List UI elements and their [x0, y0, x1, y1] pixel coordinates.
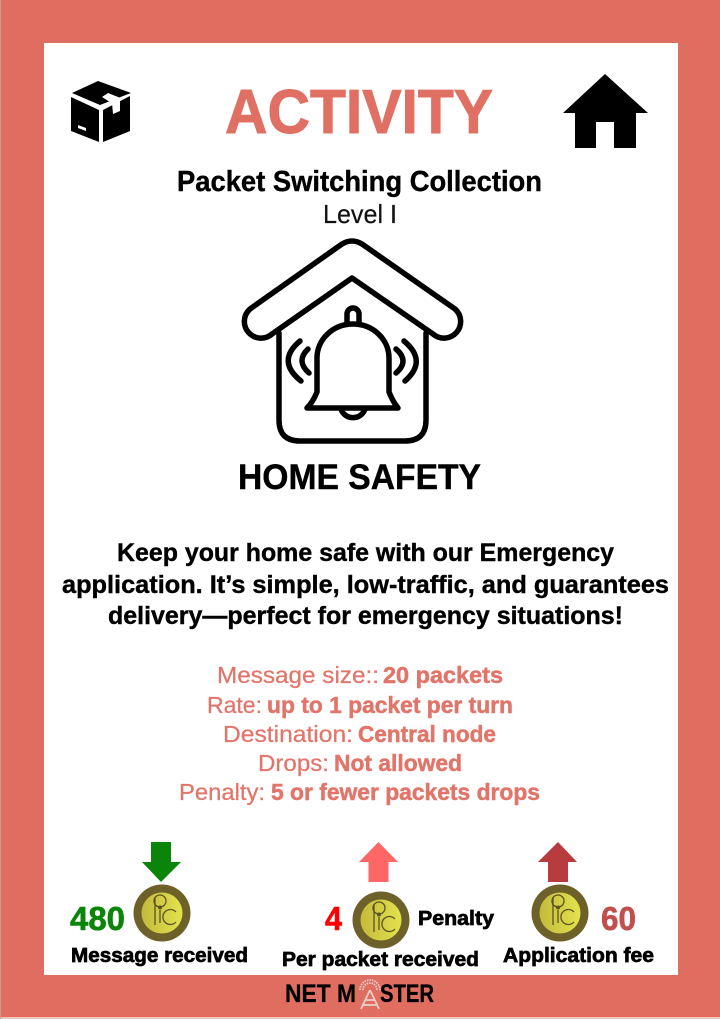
value: 60: 60 [601, 900, 636, 937]
subtitle: Packet Switching Collection [177, 166, 542, 198]
specifications list: 5 or fewer packets drops [271, 779, 540, 805]
label: per packet received: Per packet received [282, 949, 479, 971]
penalty per packet [282, 842, 495, 971]
footer logo: net master [285, 980, 434, 1009]
icon: home [563, 74, 648, 148]
specifications list: 20 packets [383, 662, 503, 688]
description: application. It’s simple, low-traffic, and guarantees [62, 571, 669, 599]
specifications list: Message size:: [217, 662, 379, 688]
icon: package box [71, 81, 131, 142]
label: penalty: Penalty [418, 908, 495, 930]
arrow: up dark red [538, 842, 577, 882]
title: ACTIVITY [225, 78, 493, 147]
specifications list: Drops: [258, 750, 329, 776]
icon: coin [134, 884, 190, 942]
value: 480: 480 [70, 900, 125, 937]
specifications list: Not allowed [334, 750, 462, 776]
value: 4: 4 [325, 900, 343, 937]
specifications list: Penalty: [179, 779, 265, 805]
arrow: up pink [359, 842, 398, 882]
arrow: down green [142, 842, 181, 882]
application fee [503, 842, 654, 967]
footer logo: net master: STER [380, 980, 434, 1008]
description: Keep your home safe with our Emergency [117, 539, 614, 567]
level: Level I [323, 199, 397, 229]
specifications list: up to 1 packet per turn [267, 692, 513, 718]
icon: house with bell [244, 241, 461, 441]
icon: coin [352, 892, 410, 948]
specifications list: Rate: [207, 692, 262, 718]
heading: home safety: HOME SAFETY [238, 458, 481, 497]
footer logo: net master: NET M [285, 980, 356, 1008]
label: message received: Message received [71, 945, 248, 967]
label: application fee: Application fee [503, 945, 654, 967]
description [62, 539, 669, 630]
icon: coin [532, 884, 588, 942]
specifications list: Destination: [223, 721, 353, 747]
reward: message received [70, 842, 248, 967]
specifications list [179, 662, 540, 805]
specifications list: Central node [358, 721, 496, 747]
description: delivery—perfect for emergency situations! [108, 602, 623, 630]
